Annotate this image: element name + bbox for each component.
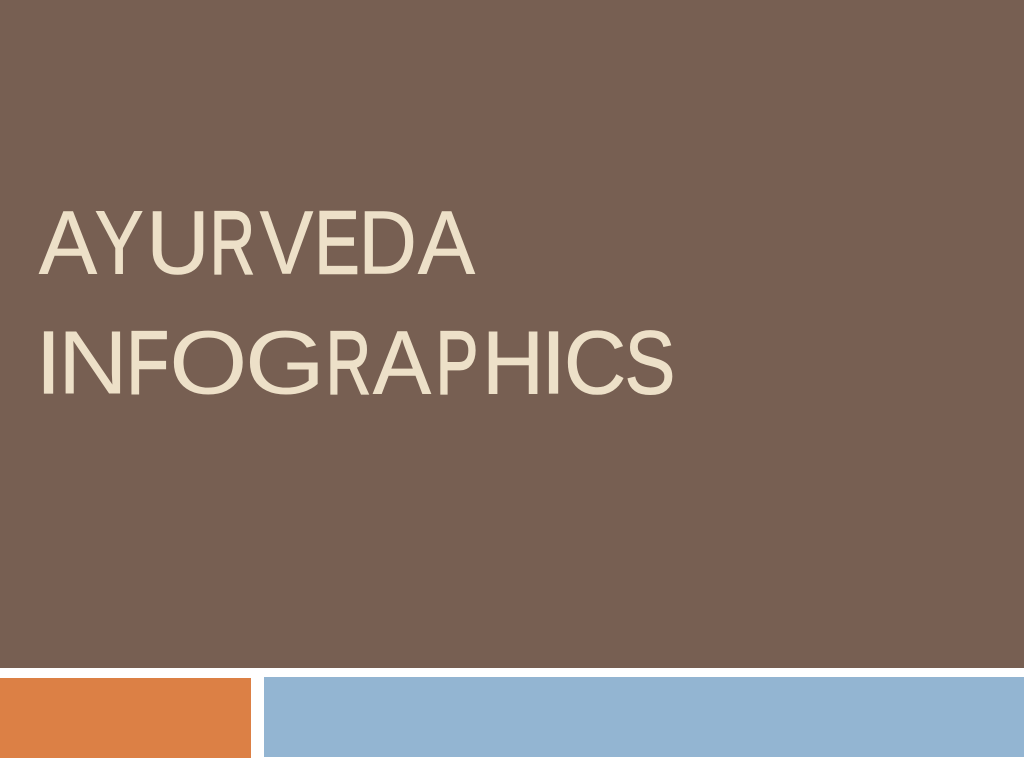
title: D [358,194,417,294]
title: C [564,314,626,414]
title: Y [95,194,144,294]
title: P [436,314,478,414]
title: V [260,194,313,294]
title: R [210,194,255,294]
title: I [35,314,62,414]
title: E [314,194,360,294]
title: R [326,314,371,414]
title: F [126,314,169,414]
title: A [418,194,475,294]
title: A [39,194,97,294]
title: H [482,314,544,414]
title: G [245,314,325,414]
title: N [58,314,128,414]
title: O [169,314,248,414]
panel: blue accent block [264,677,1024,757]
title: S [624,314,675,414]
title: I [540,314,567,414]
title: U [146,194,210,294]
title: A [373,314,431,414]
panel: orange accent block [0,678,251,758]
